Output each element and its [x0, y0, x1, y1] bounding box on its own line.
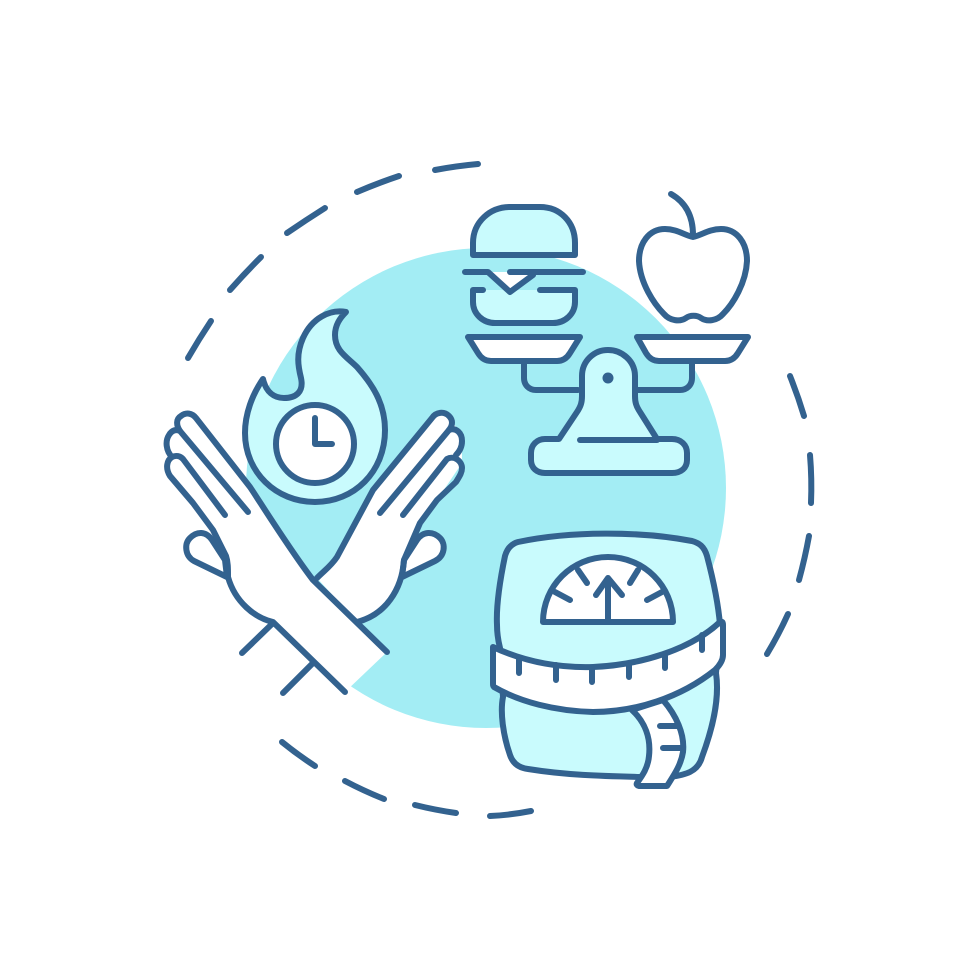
background circle	[246, 248, 726, 728]
icon: clock	[276, 405, 354, 483]
burger top bun	[473, 207, 575, 255]
burger cheese	[488, 272, 533, 292]
icon: balance scale	[468, 337, 748, 473]
burger bottom bun	[473, 290, 575, 323]
icon: left hand	[167, 413, 387, 692]
icon: apple	[639, 194, 747, 320]
scale left pan	[468, 337, 580, 361]
dashed ring	[188, 164, 811, 816]
scale body	[497, 534, 720, 777]
scale beam	[524, 362, 692, 390]
icon: burger	[465, 207, 583, 323]
tape band	[493, 622, 723, 712]
scale stand	[531, 350, 687, 473]
scale right pan	[637, 337, 748, 361]
icon: flame with clock	[245, 311, 385, 502]
scale dial	[543, 557, 673, 622]
icon: bathroom scale with tape	[493, 534, 723, 786]
icon: right hand	[242, 413, 462, 693]
tape tail	[632, 700, 683, 786]
